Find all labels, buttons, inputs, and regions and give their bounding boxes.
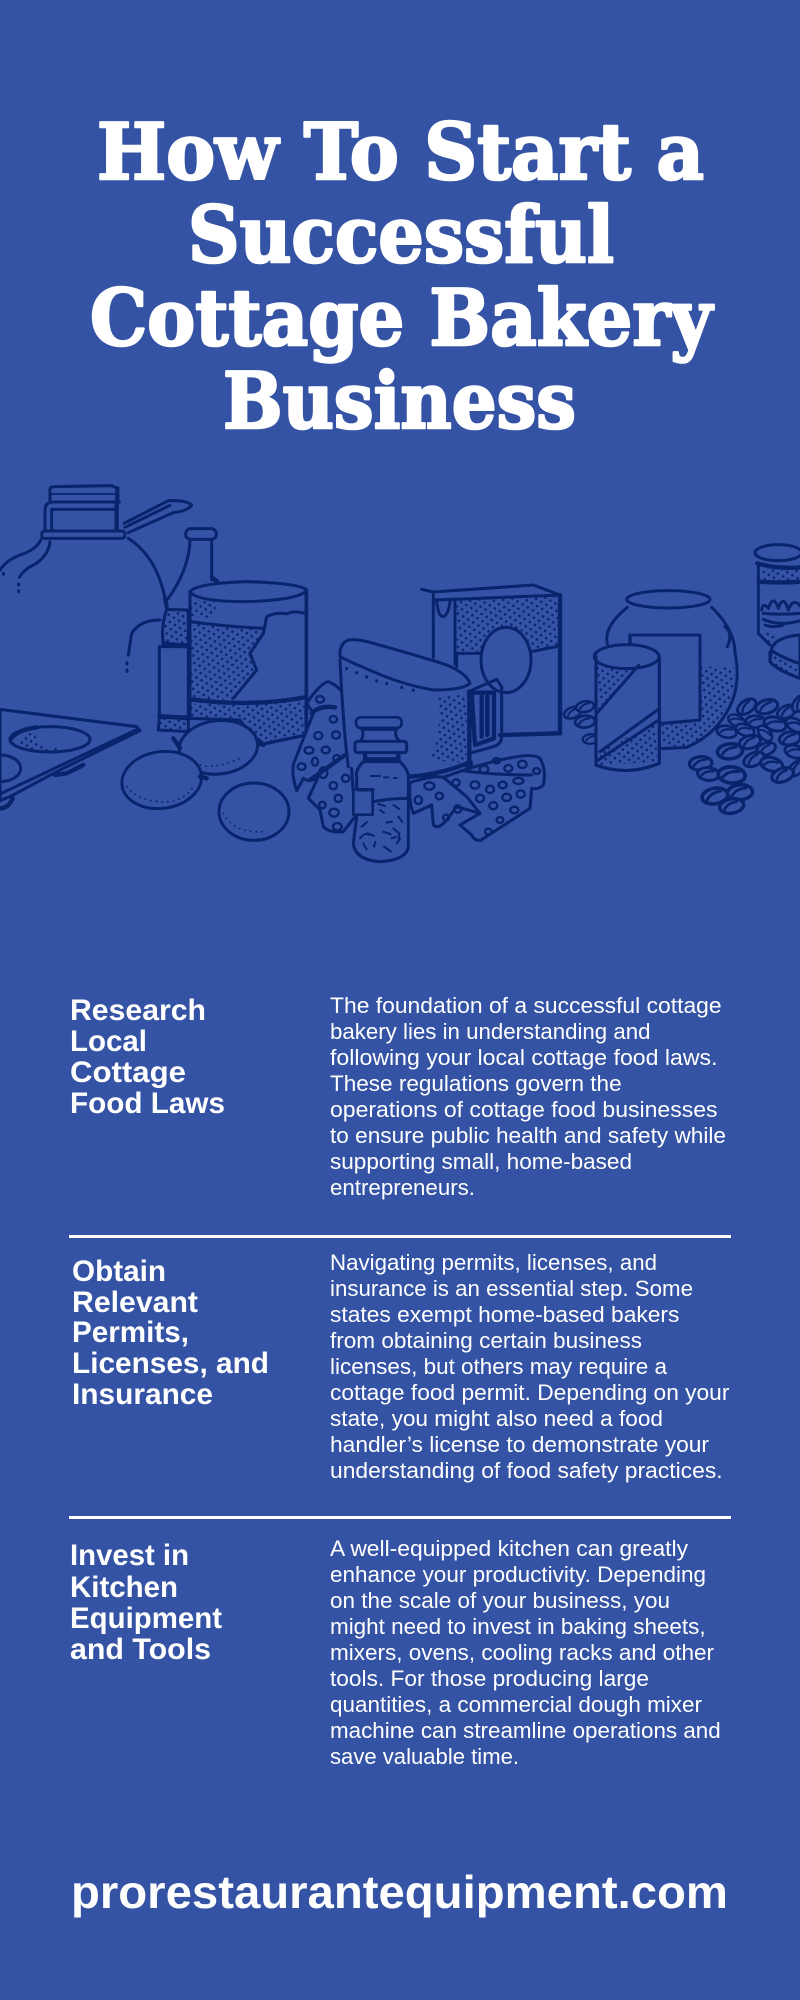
icon: small spice jar [353, 717, 408, 862]
icon: measuring cup [340, 640, 471, 777]
section 2 body text: cottage food permit. Depending on your [330, 1380, 729, 1405]
section 3 body text: mixers, ovens, cooling racks and other [330, 1640, 714, 1665]
section 1 body text: operations of cottage food businesses [330, 1097, 718, 1122]
section 1 body text: following your local cottage food laws. [330, 1045, 718, 1070]
section 1 heading [70, 994, 225, 1120]
icon: cup handle [468, 679, 502, 753]
section 1 body text: bakery lies in understanding and [330, 1019, 650, 1044]
section 3 body text: quantities, a commercial dough mixer [330, 1692, 702, 1717]
section 2 heading: Obtain [72, 1255, 166, 1288]
section 3 body text: enhance your productivity. Depending [330, 1562, 706, 1587]
section 3 body text: tools. For those producing large [330, 1666, 649, 1691]
section 2 body text: understanding of food safety practices. [330, 1458, 723, 1483]
section 1 body text: The foundation of a successful cottage [330, 993, 722, 1018]
section 2 body text: handler’s license to demonstrate your [330, 1432, 709, 1457]
icon: small left beans [562, 700, 599, 744]
section 1 heading: Cottage [70, 1056, 186, 1089]
section 2 body text: states exempt home-based bakers [330, 1302, 679, 1327]
icon: flour canister [190, 582, 307, 745]
section 1 heading: Research [70, 994, 206, 1027]
section 1 body text: to ensure public health and safety while [330, 1123, 726, 1148]
title: Cottage Bakery [90, 273, 714, 364]
icon: striped can [594, 645, 659, 770]
icon: muffin tray [0, 709, 140, 808]
section 3 body text: on the scale of your business, you [330, 1588, 670, 1613]
section 3 heading [70, 1539, 222, 1666]
section 1 body text [330, 993, 726, 1200]
section 3 heading: Invest in [70, 1539, 189, 1572]
icon: flour jug [0, 486, 192, 598]
section 2 body text: Navigating permits, licenses, and [330, 1250, 657, 1275]
icon: storage jar at right edge [755, 545, 800, 645]
icon: polka dot towel [293, 682, 544, 841]
section 3 heading: and Tools [70, 1633, 211, 1666]
section 2 heading: Licenses, and [72, 1347, 269, 1380]
title [90, 107, 714, 447]
icon: beans pile [689, 692, 800, 815]
section 2 heading: Relevant [72, 1286, 198, 1319]
section 1 heading: Local [70, 1025, 147, 1058]
footer website: prorestaurantequipment.com [71, 1866, 728, 1918]
icon: bottle and rolling pin [127, 529, 217, 732]
section 2 heading: Insurance [72, 1378, 213, 1411]
icon: eggs [118, 717, 289, 840]
icon: small bowl at right edge [770, 635, 800, 678]
section 3 heading: Equipment [70, 1602, 222, 1635]
illustration: baking ingredients and tools [0, 486, 800, 862]
section 1 body text: supporting small, home-based [330, 1149, 632, 1174]
section 3 body text: save valuable time. [330, 1744, 519, 1769]
title: Business [223, 356, 576, 447]
section 2 body text: state, you might also need a food [330, 1406, 663, 1431]
section 3 heading: Kitchen [70, 1571, 178, 1604]
section 2 heading: Permits, [72, 1316, 189, 1349]
section 3 body text: might need to invest in baking sheets, [330, 1614, 706, 1639]
title: Successful [188, 190, 614, 281]
section 1 body text: These regulations govern the [330, 1071, 622, 1096]
section 1 heading: Food Laws [70, 1087, 225, 1120]
section 3 body text [330, 1536, 721, 1769]
icon: large jar [606, 591, 737, 749]
section 2 body text: insurance is an essential step. Some [330, 1276, 693, 1301]
section 3 body text: A well-equipped kitchen can greatly [330, 1536, 688, 1561]
icon: butter box with egg [422, 585, 560, 735]
section 3 body text: machine can streamline operations and [330, 1718, 721, 1743]
section 1 body text: entrepreneurs. [330, 1175, 475, 1200]
section 2 body text: from obtaining certain business [330, 1328, 642, 1353]
section 2 body text: licenses, but others may require a [330, 1354, 668, 1379]
section 2 heading [72, 1255, 269, 1411]
title: How To Start a [97, 107, 704, 198]
section 2 body text [330, 1250, 729, 1483]
